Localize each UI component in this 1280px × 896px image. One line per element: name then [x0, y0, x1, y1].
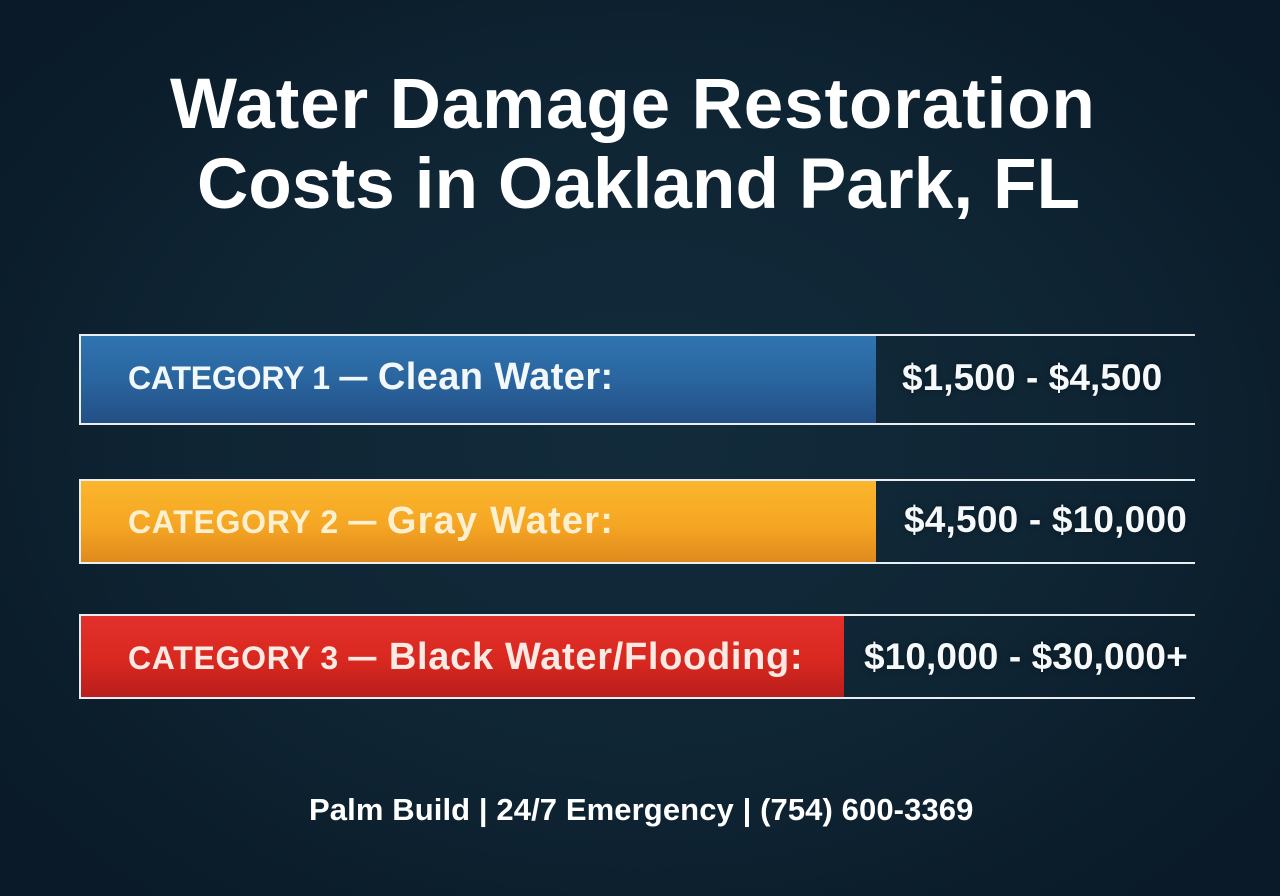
title line 2: Costs in Oakland Park, FL	[197, 145, 1080, 224]
bar: category 2	[81, 481, 876, 562]
bar: category 1	[81, 336, 876, 423]
panel: category 2 row	[79, 479, 1195, 564]
title	[170, 65, 1096, 224]
footer contact line: Palm Build | 24/7 Emergency | (754) 600-3369	[309, 792, 973, 827]
label: category 2: —	[349, 506, 376, 536]
label: category 1: CATEGORY 1 Clean Water:	[128, 356, 614, 398]
label: category 1: —	[340, 362, 367, 392]
price: category 2: $4,500 - $10,000	[904, 499, 1187, 540]
panel: category 3 row	[79, 614, 1195, 699]
bar: category 3	[81, 616, 844, 697]
label: category 3: CATEGORY 3 Black Water/Flooding:	[128, 636, 803, 678]
label: category 3: —	[349, 642, 376, 672]
price: category 3: $10,000 - $30,000+	[864, 636, 1188, 677]
label: category 2: CATEGORY 2 Gray Water:	[128, 500, 614, 542]
title line 1: Water Damage Restoration	[170, 65, 1096, 144]
panel: category 1 row	[79, 334, 1195, 425]
price: category 1: $1,500 - $4,500	[902, 357, 1162, 398]
